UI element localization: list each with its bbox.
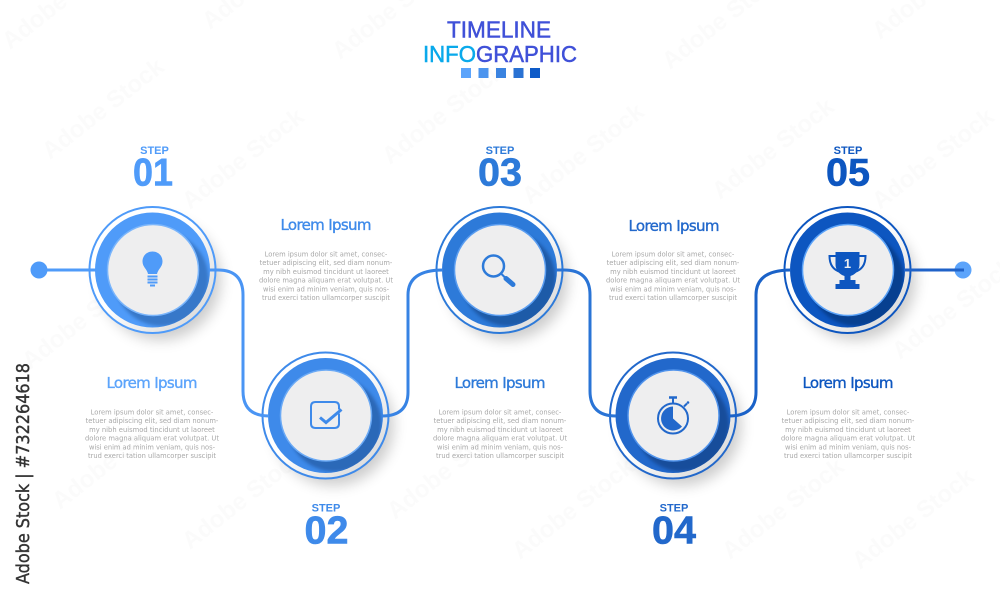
watermark pattern: Adobe Stock <box>47 403 180 515</box>
text block: step 4: Lorem ipsum dolor sit amet, consec- <box>612 250 735 258</box>
text block: step 2: tetuer adipiscing elit, sed diam nonum- <box>260 259 393 267</box>
text block: step 5: Lorem ipsum dolor sit amet, consec- <box>787 408 910 416</box>
text block: step 3: wisi enim ad minim veniam, quis nos- <box>437 443 563 451</box>
title squares <box>461 68 540 78</box>
timeline start node <box>30 262 96 278</box>
title <box>423 16 577 67</box>
watermark pattern: Adobe Stock <box>17 263 150 375</box>
text block: step 1: Lorem ipsum dolor sit amet, consec- <box>91 408 214 416</box>
step 1 label: STEP <box>140 145 169 157</box>
text block: step 5: dolore magna aliquam erat volutpat. Ut <box>781 435 915 443</box>
step 3 node <box>436 207 568 340</box>
step 5 label: 05 <box>826 152 870 194</box>
timeline connector 3 to 4 <box>556 270 616 416</box>
text block: step 1: wisi enim ad minim veniam, quis nos- <box>89 443 215 451</box>
text block: step 4: Lorem Ipsum <box>628 217 720 235</box>
step 3 label: 03 <box>478 152 522 194</box>
step 2 label: 02 <box>304 510 348 552</box>
text block: step 3: my nibh euismod tincidunt ut laoreet <box>437 426 563 434</box>
watermark pattern: Adobe Stock <box>177 103 310 215</box>
step 5 label: STEP <box>834 145 862 157</box>
step 4 label: 04 <box>652 510 696 552</box>
step 4 label: STEP <box>660 502 688 514</box>
text block: step 1 <box>85 374 219 460</box>
step 3 label: STEP <box>486 145 514 157</box>
step 4 node <box>610 352 741 486</box>
timeline end node <box>904 262 972 278</box>
text block: step 2: my nibh euismod tincidunt ut laoreet <box>263 268 389 276</box>
text block: step 2: wisi enim ad minim veniam, quis nos- <box>263 285 389 293</box>
icon: magnifier <box>483 256 513 284</box>
text block: step 1: tetuer adipiscing elit, sed diam nonum- <box>86 417 219 425</box>
watermark pattern: Adobe Stock <box>377 58 510 170</box>
text block: step 4: dolore magna aliquam erat volutpat. Ut <box>606 277 740 285</box>
watermark pattern: Adobe Stock <box>717 453 850 565</box>
text block: step 3: Lorem Ipsum <box>454 374 546 392</box>
step 2 node <box>262 352 394 486</box>
timeline connector 1 to 2 <box>209 270 269 416</box>
text block: step 1: Lorem Ipsum <box>106 374 198 392</box>
text block: step 1: dolore magna aliquam erat volutpat. Ut <box>85 435 219 443</box>
step 5 node <box>784 207 916 340</box>
text block: step 3: tetuer adipiscing elit, sed diam nonum- <box>434 417 567 425</box>
watermark pattern: Adobe Stock <box>847 463 980 575</box>
watermark pattern: Adobe Stock <box>382 413 515 525</box>
text block: step 1: my nibh euismod tincidunt ut laoreet <box>89 426 215 434</box>
text block: step 2: trud exerci tation ullamcorper suscipit <box>262 294 390 302</box>
icon: trophy: 1 <box>844 256 851 271</box>
step 2 label: STEP <box>312 502 340 514</box>
timeline connector 2 to 3 <box>382 270 443 416</box>
text block: step 2: Lorem Ipsum <box>280 216 372 234</box>
text block: step 5: Lorem Ipsum <box>802 374 894 392</box>
text block: step 2 <box>259 216 393 302</box>
step 1 node <box>90 207 220 340</box>
icon: stopwatch <box>658 398 689 434</box>
text block: step 5: tetuer adipiscing elit, sed diam nonum- <box>782 417 915 425</box>
watermark pattern: Adobe Stock <box>37 53 170 165</box>
text block: step 5: trud exerci tation ullamcorper suscipit <box>784 452 912 460</box>
text block: step 1: trud exerci tation ullamcorper suscipit <box>88 452 216 460</box>
text block: step 5: my nibh euismod tincidunt ut laoreet <box>785 426 911 434</box>
text block: step 3: dolore magna aliquam erat volutpat. Ut <box>433 435 567 443</box>
text block: step 2: dolore magna aliquam erat volutpat. Ut <box>259 277 393 285</box>
text block: step 4: wisi enim ad minim veniam, quis nos- <box>610 285 736 293</box>
text block: step 5: wisi enim ad minim veniam, quis nos- <box>785 443 911 451</box>
timeline connector 4 to 5 <box>729 270 791 416</box>
text block: step 2: Lorem ipsum dolor sit amet, consec- <box>265 250 388 258</box>
text block: step 3: Lorem ipsum dolor sit amet, consec- <box>439 408 562 416</box>
text block: step 5 <box>781 374 915 460</box>
watermark pattern: Adobe Stock <box>177 443 310 555</box>
watermark pattern: Adobe Stock <box>517 98 650 210</box>
watermark pattern: Adobe Stock <box>507 453 640 565</box>
text block: step 4: tetuer adipiscing elit, sed diam nonum- <box>607 259 740 267</box>
text block: step 3 <box>433 374 567 460</box>
step 1 label: 01 <box>133 152 173 194</box>
text block: step 4: trud exerci tation ullamcorper suscipit <box>609 294 737 302</box>
text block: step 4: my nibh euismod tincidunt ut laoreet <box>610 268 736 276</box>
title: TIMELINE <box>447 16 551 42</box>
text block: step 3: trud exerci tation ullamcorper suscipit <box>436 452 564 460</box>
icon: light bulb <box>142 252 162 286</box>
title: INFOGRAPHIC <box>423 41 577 67</box>
watermark pattern: Adobe Stock <box>707 93 840 205</box>
text block: step 4 <box>606 217 740 302</box>
stock credit: Adobe Stock | #732264618 <box>13 363 34 584</box>
watermark pattern: Adobe Stock <box>867 103 1000 215</box>
icon: checkbox <box>311 402 342 428</box>
